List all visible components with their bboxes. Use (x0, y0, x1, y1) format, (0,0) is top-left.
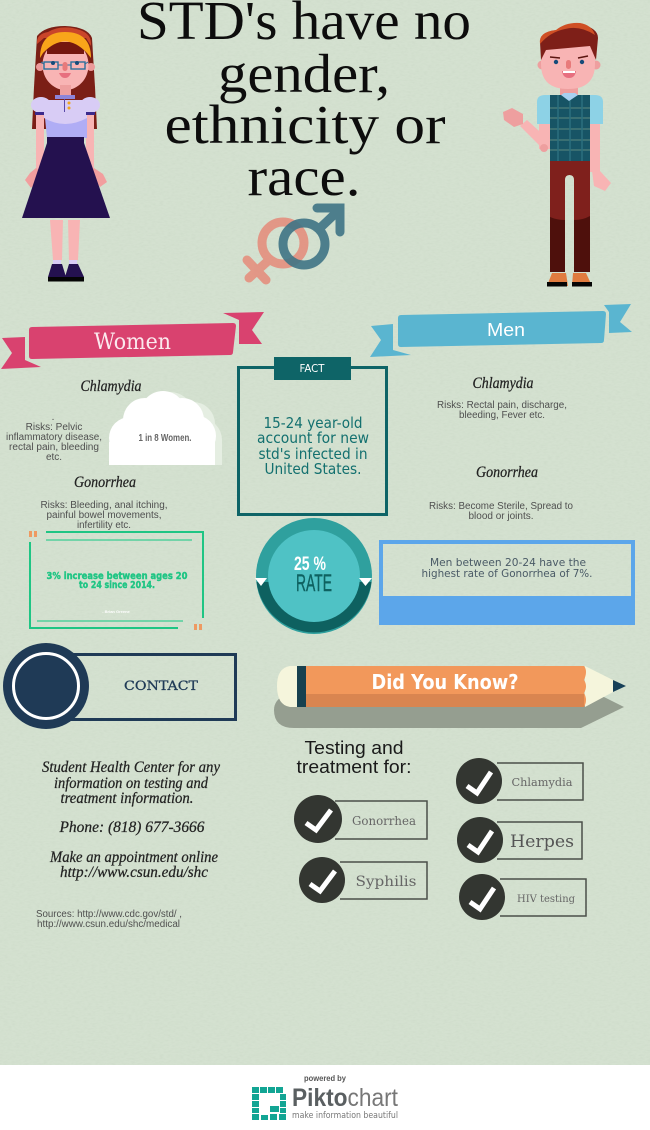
fact box: account for new (257, 429, 369, 447)
contact details: http://www.csun.edu/shc (60, 864, 208, 881)
sources: Sources: http://www.cdc.gov/std/ , (36, 909, 182, 920)
heading: testing and treatment (296, 737, 412, 777)
women: gonorrhea risks (40, 500, 168, 531)
illustration: man (503, 23, 611, 287)
fact box: United States. (264, 460, 362, 478)
icon: piktochart logo (252, 1087, 286, 1120)
women: chlamydia risks (6, 412, 102, 463)
fact box: FACT (300, 363, 325, 375)
title: ethnicity or (164, 94, 446, 155)
callout: men gonorrhea rate (379, 540, 635, 625)
men: gonorrhea risks: Risks: Become Sterile, Spread to (429, 501, 573, 512)
callout: men gonorrhea rate: Men between 20-24 have the (430, 556, 586, 569)
pencil banner: did you know (274, 666, 626, 728)
men: chlamydia heading: Chlamydia (472, 375, 534, 392)
sources (36, 909, 182, 930)
women: gonorrhea heading: Gonorrhea (74, 474, 136, 491)
contact details: Make an appointment online (49, 849, 218, 866)
rate circle: 25% rate: 25 % (294, 554, 326, 575)
callout: men gonorrhea rate: highest rate of Gonorrhea of 7%. (422, 567, 592, 580)
checklist item: Syphilis (299, 857, 427, 903)
fact box (238, 357, 386, 514)
women: chlamydia risks: . (52, 412, 54, 423)
men: chlamydia risks (437, 400, 567, 421)
title: gender, (218, 43, 390, 104)
cloud: 1 in 8 women (109, 391, 222, 465)
checklist item: Chlamydia (456, 758, 583, 804)
rate circle: 25% rate (255, 518, 372, 634)
title (137, 0, 471, 207)
icon: gender symbols (247, 208, 340, 280)
checklist item: Gonorrhea (294, 795, 427, 843)
women: gonorrhea risks: infertility etc. (77, 520, 131, 531)
contact details (42, 759, 221, 881)
footer: piktochart (0, 1065, 650, 1130)
cloud: 1 in 8 women: 1 in 8 Women. (138, 433, 192, 444)
men: gonorrhea risks (429, 501, 573, 522)
banner: Men: Men (487, 320, 525, 340)
men: chlamydia risks: bleeding, Fever etc. (459, 410, 545, 421)
checklist item: Herpes: Herpes (510, 832, 574, 852)
illustration: woman (22, 26, 110, 282)
quote box: 3% increase: to 24 since 2014. (79, 580, 155, 591)
men: chlamydia risks: Risks: Rectal pain, discharge, (437, 400, 567, 411)
quote box: 3% increase (29, 531, 203, 630)
contact details: treatment information. (60, 790, 194, 807)
footer: piktochart: Piktochart (292, 1084, 398, 1112)
women: chlamydia risks: inflammatory disease, (6, 432, 102, 443)
checklist item: Herpes (457, 817, 582, 863)
men: gonorrhea risks: blood or joints. (468, 511, 534, 522)
women: gonorrhea risks: Risks: Bleeding, anal itching, (40, 500, 168, 511)
title: race. (248, 146, 360, 207)
women: gonorrhea risks: painful bowel movements, (46, 510, 162, 521)
rate circle: 25% rate: RATE (296, 570, 332, 597)
women: chlamydia risks: Risks: Pelvic (26, 422, 82, 433)
quote box: 3% increase: 3% increase between ages 20 (46, 571, 188, 582)
contact details: Phone: (818) 677-3666 (59, 819, 204, 836)
banner: Women: Women (94, 330, 171, 355)
women: chlamydia risks: etc. (46, 452, 62, 463)
pencil banner: did you know: Did You Know? (372, 670, 518, 694)
contact badge (3, 643, 236, 729)
fact box: 15-24 year-old (264, 414, 362, 432)
women: chlamydia heading: Chlamydia (80, 378, 142, 395)
contact badge: CONTACT (124, 679, 198, 694)
banner: Men (370, 304, 632, 357)
women: chlamydia risks: rectal pain, bleeding (9, 442, 99, 453)
men: gonorrhea heading: Gonorrhea (476, 464, 538, 481)
footer: piktochart: make information beautiful (292, 1111, 398, 1121)
quote box: 3% increase: - Brian Greene (102, 609, 131, 614)
contact details: Student Health Center for any (42, 759, 221, 776)
heading: testing and treatment: treatment for: (296, 756, 412, 777)
heading: testing and treatment: Testing and (304, 737, 404, 758)
footer: piktochart: powered by (304, 1074, 347, 1083)
banner: Women (1, 312, 264, 369)
checklist item: Syphilis: Syphilis (356, 874, 416, 890)
checklist item: HIV testing (459, 874, 586, 920)
checklist item: Chlamydia: Chlamydia (512, 775, 573, 789)
sources: http://www.csun.edu/shc/medical (37, 919, 180, 930)
fact box: std's infected in (258, 445, 368, 463)
contact details: information on testing and (54, 775, 209, 792)
checklist item: HIV testing: HIV testing (517, 894, 576, 905)
checklist item: Gonorrhea: Gonorrhea (352, 814, 416, 828)
